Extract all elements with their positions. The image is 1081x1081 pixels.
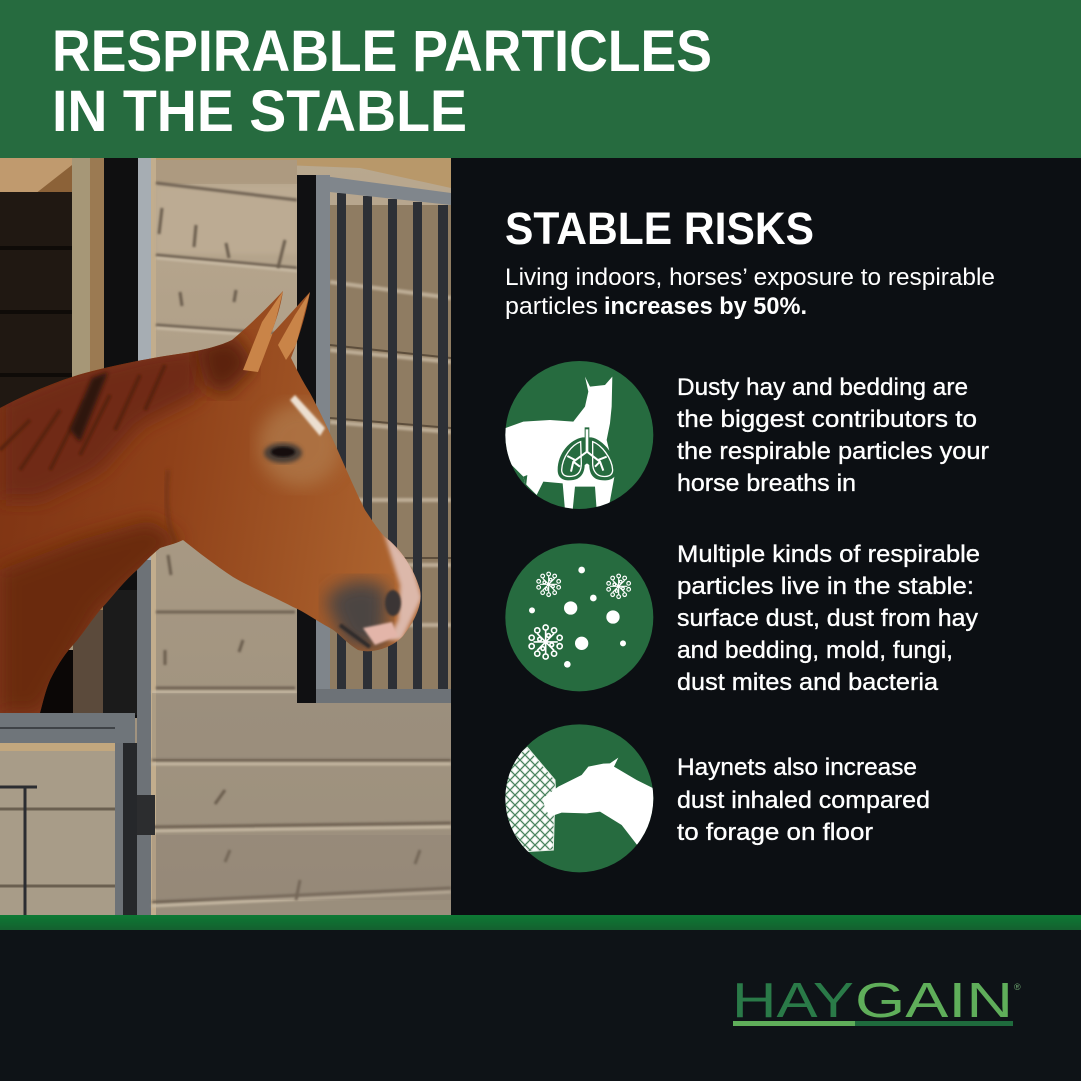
text: kinds of particles: surface dust, dust from hay bbox=[677, 605, 978, 632]
text: dusty hay bbox=[677, 374, 989, 497]
section heading: STABLE RISKS bbox=[505, 203, 814, 254]
icon: horse with lungs bbox=[500, 361, 653, 510]
wood wall planks bbox=[152, 158, 451, 906]
horse bbox=[0, 280, 430, 720]
lower door bbox=[0, 713, 155, 915]
icon: horse eating from haynet bbox=[500, 724, 657, 872]
header band bbox=[0, 0, 1081, 158]
text: kinds of particles: Multiple kinds of respirable bbox=[677, 541, 980, 568]
window bars bbox=[337, 193, 448, 690]
text: dusty hay: the biggest contributors to bbox=[677, 406, 977, 433]
text: haynets: Haynets also increase bbox=[677, 754, 917, 781]
text: kinds of particles: particles live in the stable: bbox=[677, 573, 974, 600]
text: kinds of particles bbox=[677, 541, 980, 696]
intro text: particles bbox=[505, 293, 598, 320]
title: RESPIRABLE PARTICLES bbox=[52, 19, 712, 84]
logo: Haygain: HAY bbox=[732, 974, 854, 1028]
text: dusty hay: the respirable particles your bbox=[677, 438, 989, 465]
footer background bbox=[0, 930, 1081, 1081]
logo: Haygain: ® bbox=[1014, 982, 1021, 992]
icon: particles and snowflakes bbox=[505, 543, 653, 691]
window frame bbox=[297, 175, 451, 703]
text: haynets: dust inhaled compared bbox=[677, 787, 930, 814]
logo: Haygain: GAIN bbox=[855, 974, 1013, 1028]
intro text bbox=[505, 264, 995, 320]
text: dusty hay: horse breaths in bbox=[677, 470, 856, 497]
title bbox=[52, 19, 712, 144]
stable doorway and posts bbox=[0, 158, 156, 915]
intro text: increases by 50%. bbox=[604, 293, 807, 320]
window interior wood bbox=[330, 205, 451, 695]
footer divider band bbox=[0, 915, 1081, 930]
logo: Haygain bbox=[732, 974, 1021, 1028]
intro text: Living indoors, horses’ exposure to respirable bbox=[505, 264, 995, 291]
text: haynets: to forage on floor bbox=[677, 819, 873, 846]
photo: chestnut horse looking out of a stable bbox=[0, 158, 451, 915]
text: kinds of particles: dust mites and bacteria bbox=[677, 669, 939, 696]
text: kinds of particles: and bedding, mold, fungi, bbox=[677, 637, 953, 664]
title: IN THE STABLE bbox=[52, 79, 467, 144]
text: haynets bbox=[677, 754, 930, 846]
text: dusty hay: Dusty hay and bedding are bbox=[677, 374, 968, 401]
